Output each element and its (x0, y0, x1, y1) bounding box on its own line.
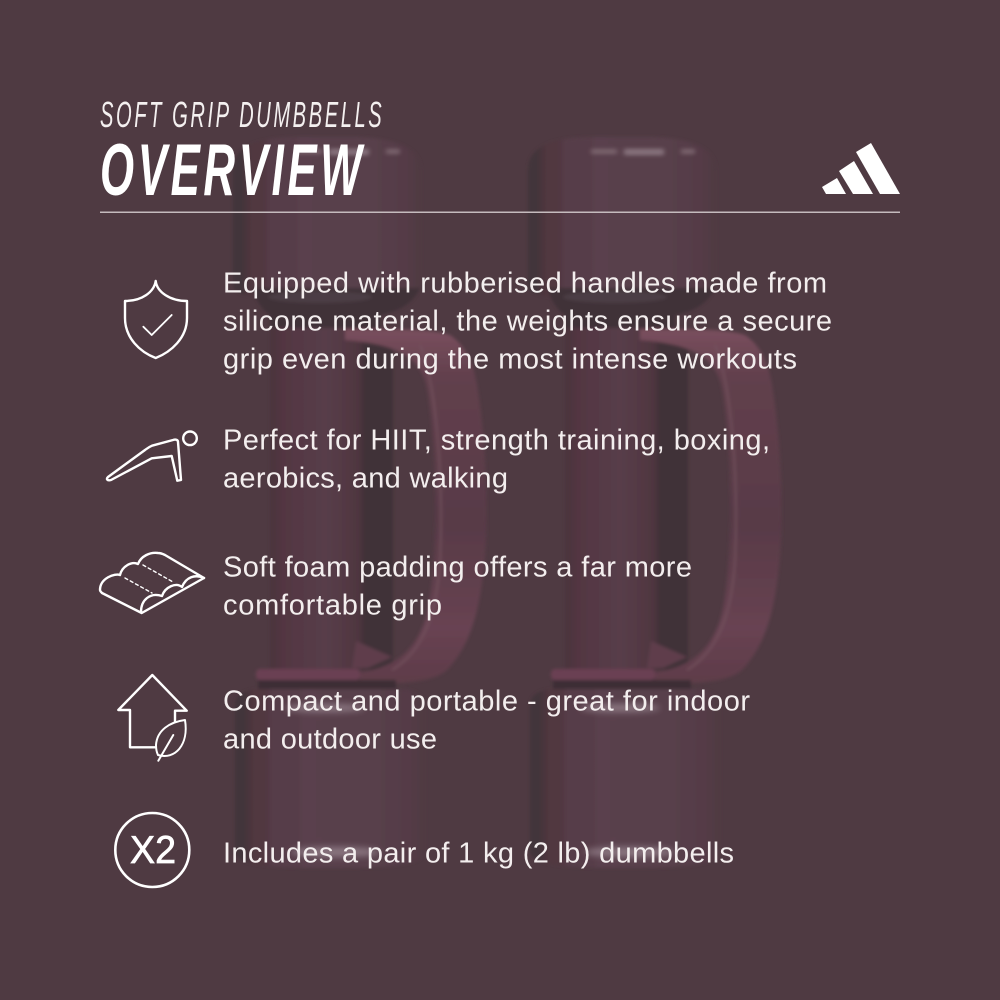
icon: house with leaf (118, 675, 187, 761)
icon: x2 badge: X2 (130, 829, 176, 872)
icon: adidas logo (822, 143, 900, 194)
text: secure grip: Equipped with rubberised handles made from (223, 268, 827, 300)
header divider (100, 212, 900, 213)
icon: x2 badge (115, 813, 189, 887)
text: uses: aerobics, and walking (223, 462, 508, 494)
eyebrow: product name: SOFT GRIP DUMBBELLS (100, 96, 382, 136)
text: secure grip: silicone material, the weights ensure a secure (223, 306, 832, 338)
text: pair: Includes a pair of 1 kg (2 lb) dumbbells (223, 838, 734, 870)
title: OVERVIEW (100, 130, 365, 211)
icon: plank figure (107, 432, 197, 481)
text: uses (223, 424, 770, 494)
text: secure grip: grip even during the most intense workouts (223, 344, 797, 376)
text: portable (223, 686, 750, 756)
icon: shield with check (125, 281, 187, 358)
text: secure grip (223, 268, 832, 376)
text: foam (223, 552, 692, 622)
photo: left dumbbell (233, 137, 487, 868)
text: foam: comfortable grip (223, 590, 442, 622)
text: foam: Soft foam padding offers a far more (223, 552, 692, 584)
text: portable: Compact and portable - great for indoor (223, 686, 750, 718)
photo: right dumbbell (528, 137, 782, 868)
text: uses: Perfect for HIIT, strength training, boxing, (223, 424, 770, 456)
icon: foam padding (100, 553, 204, 613)
text: portable: and outdoor use (223, 724, 437, 756)
